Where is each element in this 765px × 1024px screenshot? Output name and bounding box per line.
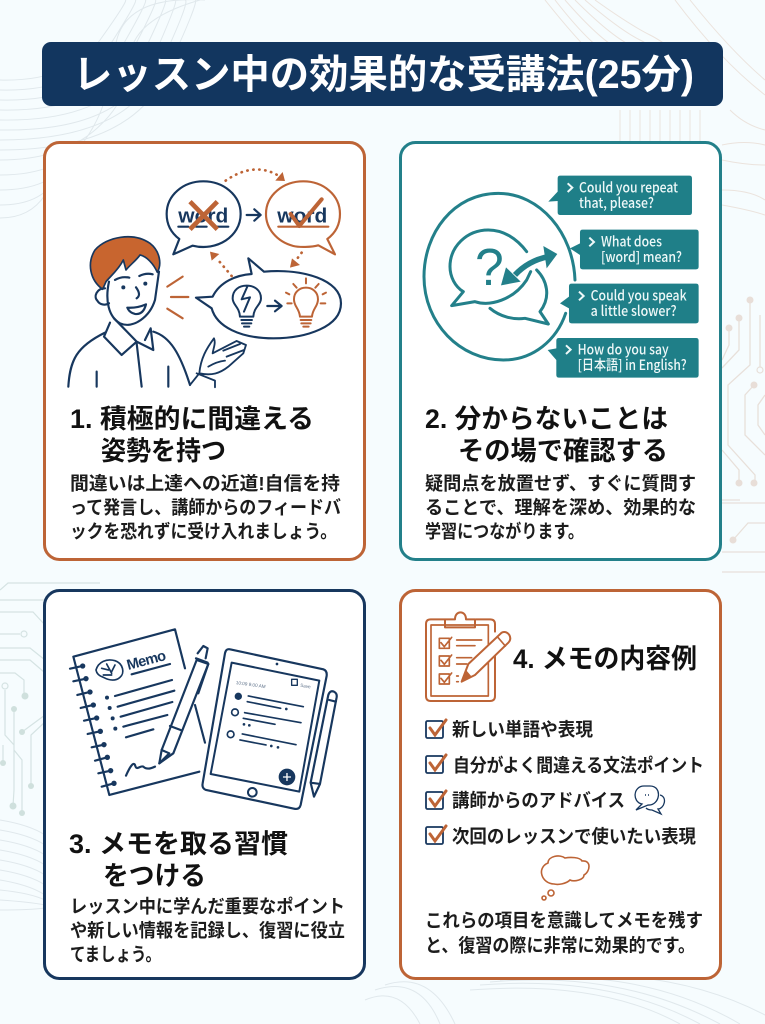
body 2: ることで、理解を深め、効果的な xyxy=(425,497,696,518)
question 3: Could you speak xyxy=(591,285,687,305)
illustration: question bubbles xyxy=(424,176,699,378)
heading 2: 2. 分からないことは xyxy=(425,404,668,434)
body 1: 間違いは上達への近道!自信を持 xyxy=(70,473,340,494)
question 4: How do you say xyxy=(578,339,669,359)
body 4: と、復習の際に非常に効果的です。 xyxy=(425,935,695,956)
item: expressions: 次回のレッスンで使いたい表現 xyxy=(452,826,696,847)
heading 1: 姿勢を持つ xyxy=(101,436,226,466)
body 4: これらの項目を意識してメモを残す xyxy=(425,910,703,931)
question 2 xyxy=(570,230,699,269)
question 4: [日本語] in English? xyxy=(578,355,687,375)
item: new words: 新しい単語や表現 xyxy=(452,719,593,740)
illustration: notebook, pen and tablet xyxy=(70,629,337,809)
heading 2: その場で確認する xyxy=(458,436,668,466)
illustration: teacher and speech bubbles: word xyxy=(177,205,228,228)
title bar xyxy=(42,42,723,106)
illustration: teacher and speech bubbles: word xyxy=(276,205,327,228)
question 1 xyxy=(548,176,692,215)
body 1: ックを恐れずに受け入れましょう。 xyxy=(70,521,337,542)
question 2: What does xyxy=(601,231,662,251)
illustration: notebook, pen and tablet: Save xyxy=(300,683,312,690)
heading 3: 3. メモを取る習慣 xyxy=(69,829,288,859)
item: grammar: 自分がよく間違える文法ポイント xyxy=(453,755,704,776)
panel 3: note-taking habit xyxy=(44,590,364,978)
heading 4: 4. メモの内容例 xyxy=(513,644,697,674)
icon: thought cloud xyxy=(541,856,589,900)
illustration: teacher and speech bubbles xyxy=(68,169,341,387)
body 2: 疑問点を放置せず、すぐに質問す xyxy=(425,473,696,494)
title text: レッスン中の効果的な受講法(25分) xyxy=(73,53,694,97)
body 3: レッスン中に学んだ重要なポイント xyxy=(70,896,345,917)
illustration: notebook, pen and tablet: 10:09 9:00 AM xyxy=(236,680,266,689)
question 4 xyxy=(548,338,699,378)
illustration: notebook, pen and tablet: Memo xyxy=(125,648,168,674)
heading 1: 1. 積極的に間違える xyxy=(70,404,314,434)
question 1: that, please? xyxy=(579,193,654,213)
panel 4: memo content examples xyxy=(400,590,720,978)
question 1: Could you repeat xyxy=(579,177,678,197)
body 3: や新しい情報を記録し、復習に役立 xyxy=(70,920,345,941)
illustration: question bubbles: ? xyxy=(475,238,504,296)
icon: chat bubbles xyxy=(635,786,664,814)
body 3: てましょう。 xyxy=(70,944,161,965)
heading 3: をつける xyxy=(103,861,206,891)
question 2: [word] mean? xyxy=(601,247,682,267)
question 3: a little slower? xyxy=(591,301,677,321)
body 2: 学習につながります。 xyxy=(425,521,584,542)
panel 2: ask immediately xyxy=(400,142,720,560)
panel 1: make mistakes actively xyxy=(44,142,364,560)
checklist xyxy=(426,719,704,847)
question 3 xyxy=(560,284,699,323)
body 1: って発言し、講師からのフィードバ xyxy=(70,497,341,518)
icon: clipboard with pencil xyxy=(426,612,510,701)
item: advice: 講師からのアドバイス xyxy=(452,790,625,811)
